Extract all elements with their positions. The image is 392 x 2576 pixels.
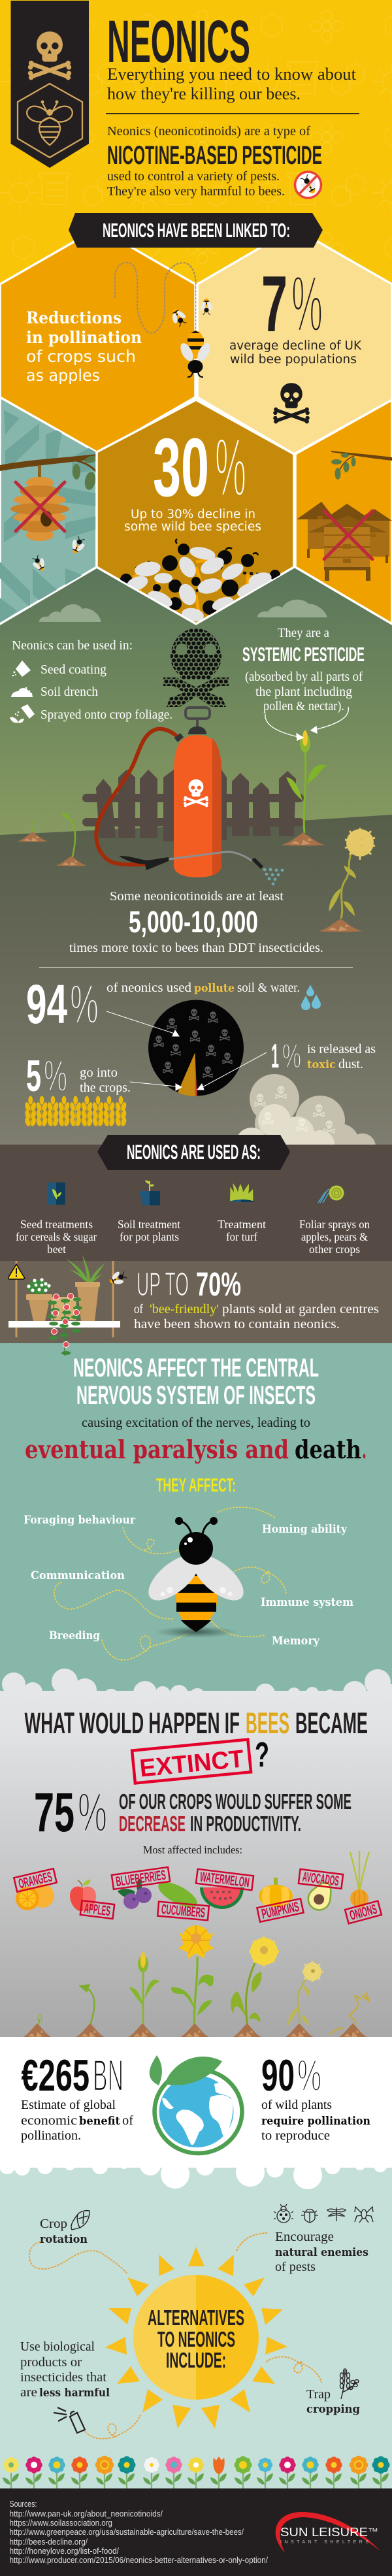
stamp: apples: APPLES	[84, 1901, 111, 1919]
icon: watermelon	[200, 1887, 244, 1909]
text block: 5,000-10,000 times more toxic	[69, 889, 323, 955]
icon: clouds	[39, 600, 327, 622]
text block: sources	[9, 2499, 268, 2565]
stamp: oranges	[14, 1868, 57, 1893]
logo: sun leisure	[276, 2512, 380, 2552]
stage: full flower	[171, 1925, 214, 2028]
text block: trap cropping: Trap	[306, 2387, 331, 2402]
text block: sources: http://www.pan-uk.org/about_neonicotinoids/	[9, 2509, 163, 2519]
labels: affected abilities: Foraging behaviour	[24, 1514, 136, 1527]
text block: sources: http://www.producer.com/2015/06/neonics-better-alternatives-or-only-option/	[9, 2555, 268, 2565]
text block: 5,000-10,000 times more toxic: 5,000-10,000	[129, 905, 258, 939]
illustration: pesticide sprayer and fence	[82, 708, 304, 885]
labels: affected abilities: Communication	[31, 1569, 125, 1582]
stage: bud	[129, 1952, 160, 2028]
text block: paralysis and death: causing excitation of the nerves, leading to	[82, 1414, 310, 1430]
illustration: plants on ground	[17, 730, 375, 932]
question mark: ?	[255, 1735, 269, 1774]
pie skulls	[154, 1009, 233, 1078]
text block: sources: http://bees-decline.org/	[9, 2537, 88, 2547]
text block: usage captions: other crops	[309, 1243, 360, 1256]
panel: ground	[0, 815, 392, 1145]
arrows: to the flower	[265, 707, 348, 740]
stat: 5% into crops: go into	[80, 1066, 118, 1080]
stat: wild plants	[261, 2051, 370, 2143]
caption: average decline of UK	[229, 339, 362, 353]
illustration: plant growth stages	[22, 1925, 369, 2038]
stat: economic benefit: benefit	[79, 2115, 120, 2127]
hanging plant with red flowers	[8, 1294, 120, 1356]
section heading banner: linked to	[69, 213, 323, 248]
panel: teal nervous system section	[0, 1343, 392, 1709]
text block: crop rotation	[40, 2217, 88, 2245]
stat: wild plants: require pollination	[261, 2115, 370, 2127]
heading: alternatives: INCLUDE:	[166, 2349, 226, 2373]
stamp: pumpkins	[257, 1899, 304, 1923]
icon: seed bag	[48, 1182, 65, 1205]
heading: reductions: Reductions	[26, 308, 122, 327]
text block: systemic pesticide: (absorbed by all parts of	[245, 670, 363, 684]
arrows: pie callouts	[106, 1011, 267, 1090]
text block: biological products	[20, 2340, 110, 2400]
text block: sources: http://honeylove.org/list-of-food/	[9, 2546, 119, 2556]
stat: up to 70%: UP TO	[137, 1265, 189, 1303]
illustration: toxic dust cloud	[238, 1074, 376, 1145]
icon: no bees sign	[295, 172, 321, 198]
logo: sun leisure: SUN LEISURE	[280, 2526, 368, 2539]
stat: economic benefit	[21, 2051, 133, 2143]
text block: crop rotation: rotation	[40, 2233, 88, 2245]
fence	[82, 770, 304, 841]
heading: reductions: as apples	[26, 366, 100, 385]
icon: spider	[355, 2207, 373, 2223]
icon: crossed out wild hive	[10, 465, 69, 541]
stat: 94% pollute	[26, 973, 300, 1035]
text block: paralysis and death	[25, 1414, 367, 1464]
text block: neonics can be used in: Seed coating	[41, 662, 106, 677]
stat: up to 70%: 70%	[196, 1265, 241, 1303]
warning sign	[8, 1264, 24, 1279]
panel: white stats section	[0, 2037, 392, 2168]
panel: yellow header background	[0, 0, 392, 301]
text block: usage captions: for turf	[226, 1230, 257, 1243]
panel: pale alternatives section	[0, 2168, 392, 2488]
stat: wild plants: of wild plants	[261, 2098, 332, 2112]
stat: 94% pollute: of neonics used	[106, 981, 191, 995]
dotted paths in alternatives	[29, 2233, 321, 2439]
text block: trap cropping: cropping	[306, 2403, 360, 2415]
stage: wilting flower	[288, 1961, 323, 2028]
panel: grey extinct section	[0, 1669, 392, 2037]
stat: economic benefit: of	[122, 2113, 133, 2128]
text block: biological products: less harmful	[39, 2387, 110, 2399]
spray nozzle	[119, 852, 284, 885]
sprayer hose	[96, 729, 179, 864]
text block: bee-friendly plants	[134, 1302, 379, 1331]
labels: affected abilities	[24, 1514, 353, 1648]
plant: budding plant	[281, 730, 328, 845]
text block: trap cropping	[306, 2387, 360, 2415]
soil mounds	[22, 2023, 368, 2038]
text block: usage captions: Soil treatment	[118, 1218, 180, 1231]
text block: decrease in productivity	[119, 1790, 351, 1836]
illustration: plant shelf	[8, 1254, 120, 1356]
text block: natural enemies: of pests	[275, 2260, 316, 2274]
stat: wild plants: %	[297, 2051, 321, 2100]
icon: oranges	[16, 1884, 54, 1910]
text block: biological products: insecticides that	[20, 2370, 106, 2385]
pie chart: where neonics go	[148, 1000, 244, 1096]
stamp: apples	[80, 1900, 114, 1919]
stat: wild plants: to reproduce	[261, 2128, 330, 2143]
illustration: hero bee with flight path	[167, 299, 214, 377]
heading: they affect: THEY AFFECT:	[156, 1475, 236, 1496]
text block: sources: http://www.greenpeace.org/usa/sustainable-agriculture/save-the-bees/	[9, 2527, 244, 2537]
text block: bee-friendly plants: plants sold at garden centres	[222, 1302, 379, 1316]
heading: alternatives	[148, 2306, 244, 2373]
stat: economic benefit: pollination.	[21, 2128, 81, 2143]
icon: turf	[229, 1183, 255, 1202]
icon: blueberries	[118, 1878, 152, 1909]
stamps: crop labels	[14, 1867, 382, 1924]
text block: sources: https://www.soilassociation.org	[9, 2518, 112, 2528]
icon: cucumber	[155, 1877, 201, 1912]
stat: 1% toxic dust: %	[282, 1037, 301, 1075]
heading: reductions: in pollination	[26, 328, 142, 347]
panel: footer	[0, 2488, 392, 2576]
text block: 5,000-10,000 times more toxic: times more toxic to bees than DDT insecticides.	[69, 941, 323, 955]
icon: onion	[350, 1851, 369, 1908]
text block: paralysis and death: .	[362, 1435, 367, 1464]
icon: gold bee in hexagon	[18, 84, 82, 157]
dotted paths to labels	[54, 1507, 286, 1660]
text block: biological products: Use biological	[20, 2340, 95, 2354]
text block: sources: Sources:	[9, 2499, 37, 2509]
stat: 1% toxic dust: is released as	[307, 1042, 376, 1056]
icon: plant pot	[140, 1181, 160, 1205]
text block: bee-friendly plants: 'bee-friendly'	[150, 1302, 219, 1316]
title: NEONICS	[107, 8, 250, 75]
text block: usage captions: Foliar sprays on	[299, 1218, 370, 1231]
stat: 1% toxic dust: 1	[271, 1037, 279, 1075]
white flowers and small pot	[26, 1278, 52, 1321]
stat: 5% into crops: 5	[26, 1051, 41, 1101]
text block: crop rotation: Crop	[40, 2217, 67, 2231]
icon: crossed out beehives	[297, 502, 392, 581]
subtitle	[107, 65, 357, 103]
aloe plant and big pot	[67, 1254, 105, 1321]
stat: 1% toxic dust	[271, 1037, 376, 1075]
panel: center hexagon 30 percent: %	[215, 421, 246, 514]
labels: affected abilities: Memory	[272, 1635, 320, 1648]
text block: usage captions: Treatment	[218, 1218, 266, 1231]
stat: wild plants: 90	[261, 2051, 295, 2100]
heading: reductions	[26, 308, 142, 385]
stage: dead plant	[330, 1993, 369, 2035]
text block: bee-friendly plants: have been shown to contain neonics.	[134, 1317, 340, 1331]
stamp: cucumbers	[157, 1902, 209, 1921]
divider	[106, 113, 359, 114]
text block: usage captions	[16, 1218, 370, 1256]
stat: economic benefit: economic	[21, 2113, 77, 2128]
icon: black skull	[273, 383, 310, 423]
illustration: flower row	[3, 2456, 389, 2488]
text block: bee-friendly plants: of	[134, 1302, 143, 1316]
stage: seedling	[38, 2015, 42, 2028]
caption: some wild bee species	[124, 520, 261, 534]
text block: usage captions: Seed treatments	[20, 1218, 93, 1231]
caption: wild bee populations	[230, 353, 357, 367]
text block: neonics can be used in	[10, 638, 172, 727]
text block: natural enemies	[275, 2230, 368, 2274]
heading: central nervous system	[73, 1354, 319, 1410]
section heading banner: used as: NEONICS ARE USED AS:	[127, 1140, 261, 1164]
stamp: pumpkins: PUMPKINS	[260, 1899, 301, 1922]
text block: usage captions: apples, pears &	[301, 1230, 368, 1243]
subtitle: Everything you need to know about	[107, 65, 357, 84]
text block: neonics can be used in: Neonics can be used in:	[12, 638, 133, 653]
text block: neonics can be used in: Soil drench	[41, 685, 98, 699]
caption	[229, 339, 362, 367]
text block: biological products: products or	[20, 2355, 82, 2370]
icon: apple	[70, 1880, 96, 1911]
caption: most affected: Most affected includes:	[143, 1844, 242, 1856]
stat: 75%: %	[78, 1782, 107, 1843]
stamp: watermelon: WATERMELON	[199, 1869, 250, 1891]
text block: natural enemies: natural enemies	[275, 2246, 368, 2258]
stat: economic benefit: €265	[21, 2051, 90, 2100]
stat: 94% pollute: %	[70, 973, 99, 1035]
text block: biological products: are	[20, 2385, 37, 2400]
icon: honeycomb skull	[163, 628, 229, 707]
caption: Up to 30% decline in	[131, 508, 255, 521]
stamp: cucumbers: CUCUMBERS	[161, 1902, 206, 1921]
stat: 5% into crops: %	[44, 1051, 67, 1101]
icon: small bees	[29, 535, 88, 574]
text block: natural enemies: Encourage	[275, 2230, 334, 2244]
stat: 94% pollute: 94	[26, 973, 67, 1035]
plant: seedling	[17, 820, 48, 842]
section heading banner: used as	[97, 1135, 290, 1170]
icon: gold skull and crossbones	[28, 31, 71, 80]
stamp: avocados: AVOCADOS	[302, 1870, 340, 1889]
text block: decrease in productivity: DECREASE	[119, 1812, 186, 1836]
stat: 30%: 30	[153, 421, 209, 514]
icon: spray on foliage	[10, 704, 35, 727]
icon: ladybird	[274, 2204, 293, 2223]
plant: young shoot	[56, 813, 87, 866]
stage: shoot	[78, 1984, 95, 2028]
icon: soil drench	[11, 687, 33, 697]
icon: bee near shelf	[107, 1268, 128, 1289]
icon: dragonfly	[327, 2208, 346, 2221]
logo: sun leisure: INSTANT SHELTERS	[280, 2540, 368, 2545]
panel: orange hexagon with beehives	[295, 400, 392, 624]
text block: usage captions: for cereals & sugar	[16, 1230, 97, 1243]
text block: systemic pesticide: the plant including	[255, 685, 352, 699]
stamp: extinct: EXTINCT	[139, 1745, 245, 1783]
stat: 5% into crops	[26, 1051, 131, 1101]
labels: affected abilities: Homing ability	[262, 1523, 348, 1536]
labels: affected abilities: Immune system	[261, 1596, 353, 1609]
heading: what would happen: BEES	[246, 1706, 289, 1740]
stat: 1% toxic dust: toxic	[307, 1058, 336, 1071]
stat: 7%: 7	[261, 259, 287, 348]
icon: spray can	[54, 2407, 85, 2433]
heading: alternatives: ALTERNATIVES	[148, 2306, 244, 2330]
stat: 1% toxic dust: dust.	[338, 1057, 363, 1071]
panel: hexagon 7 percent	[197, 228, 392, 454]
stat: 5% into crops: the crops.	[80, 1081, 131, 1095]
branch and leaves	[0, 451, 118, 503]
panel: hexagon 7 percent: %	[291, 259, 323, 348]
stat: 75%: 75	[34, 1782, 74, 1843]
panel: teal hexagon with wild hive	[0, 397, 97, 625]
stamp: oranges: ORANGES	[17, 1869, 54, 1892]
icon: beetle	[301, 2209, 318, 2223]
text block: intro	[107, 124, 322, 199]
icon: grain	[340, 2369, 359, 2399]
panel: center hexagon 30 percent	[97, 400, 294, 624]
dotted flight path	[115, 263, 196, 333]
labels: affected abilities: Breeding	[49, 1629, 100, 1642]
stage: fading flower	[231, 1936, 279, 2028]
subtitle: how they're killing our bees.	[107, 84, 301, 103]
text block: neonics can be used in: Sprayed onto crop foliage.	[41, 708, 172, 722]
tank handle	[174, 708, 210, 742]
stamp: avocados	[299, 1869, 343, 1889]
text block: paralysis and death: death	[295, 1435, 361, 1464]
heading: reductions: of crops such	[26, 347, 136, 366]
text block: 5,000-10,000 times more toxic: Some neonicotinoids are at least	[110, 889, 284, 904]
stat: economic benefit: Estimate of global	[21, 2098, 116, 2112]
stamp: watermelon	[196, 1869, 253, 1891]
text block: intro: They're also very harmful to bees.	[107, 184, 285, 199]
heading: what would happen: WHAT WOULD HAPPEN IF	[25, 1706, 240, 1740]
illustration: sun	[105, 2247, 287, 2428]
icon: rolled hose	[318, 1185, 344, 1203]
text block: usage captions: for pot plants	[120, 1230, 179, 1243]
illustration: pile of dead bees	[120, 539, 280, 623]
text block: intro: used to control a variety of pests.	[107, 169, 280, 184]
icon: seed coating	[12, 660, 31, 677]
stamp: blueberries	[112, 1867, 170, 1890]
text block: systemic pesticide: They are a	[278, 626, 329, 640]
icon: corn	[71, 2211, 90, 2230]
logo: sun leisure: TM	[368, 2528, 378, 2533]
cloud edge	[0, 2155, 387, 2189]
text block: intro: Neonics (neonicotinoids) are a type of	[107, 124, 310, 139]
text block: usage captions: beet	[47, 1243, 66, 1256]
panel: brown used as section	[0, 1145, 392, 1261]
stat: economic benefit: BN	[93, 2051, 123, 2100]
stat: 94% pollute: pollute	[194, 982, 235, 995]
chevron texture	[0, 410, 96, 624]
stamp: onions	[345, 1901, 382, 1924]
skull on tank	[184, 779, 208, 807]
panel: hexagon reductions in pollination	[0, 228, 196, 453]
plant: dying flower	[318, 828, 375, 932]
stamp: blueberries: BLUEBERRIES	[115, 1868, 167, 1889]
icon: avocado	[304, 1878, 337, 1914]
icon: wheat row	[24, 1096, 127, 1127]
text block: systemic pesticide	[242, 626, 365, 713]
text block: paralysis and death: eventual paralysis and	[25, 1435, 289, 1464]
banner: skull and bee ribbon	[10, 1, 89, 168]
icon: pumpkin	[259, 1878, 293, 1907]
stat: 94% pollute: soil & water.	[237, 981, 300, 995]
branch and leaves	[331, 451, 392, 480]
illustration: big bee	[141, 1517, 251, 1638]
icon: globe with leaves	[150, 2055, 242, 2153]
caption	[124, 508, 261, 534]
text block: systemic pesticide: pollen & nectar).	[263, 699, 344, 713]
icon: water drops	[301, 985, 321, 1010]
panel: garden centre section	[0, 1261, 392, 1343]
text block: decrease in productivity: IN PRODUCTIVITY.	[190, 1812, 301, 1836]
sprayer tank	[174, 735, 221, 877]
heading: alternatives: TO NEONICS	[157, 2328, 235, 2352]
panel: green field background	[0, 562, 392, 843]
icon: insects	[274, 2204, 373, 2223]
